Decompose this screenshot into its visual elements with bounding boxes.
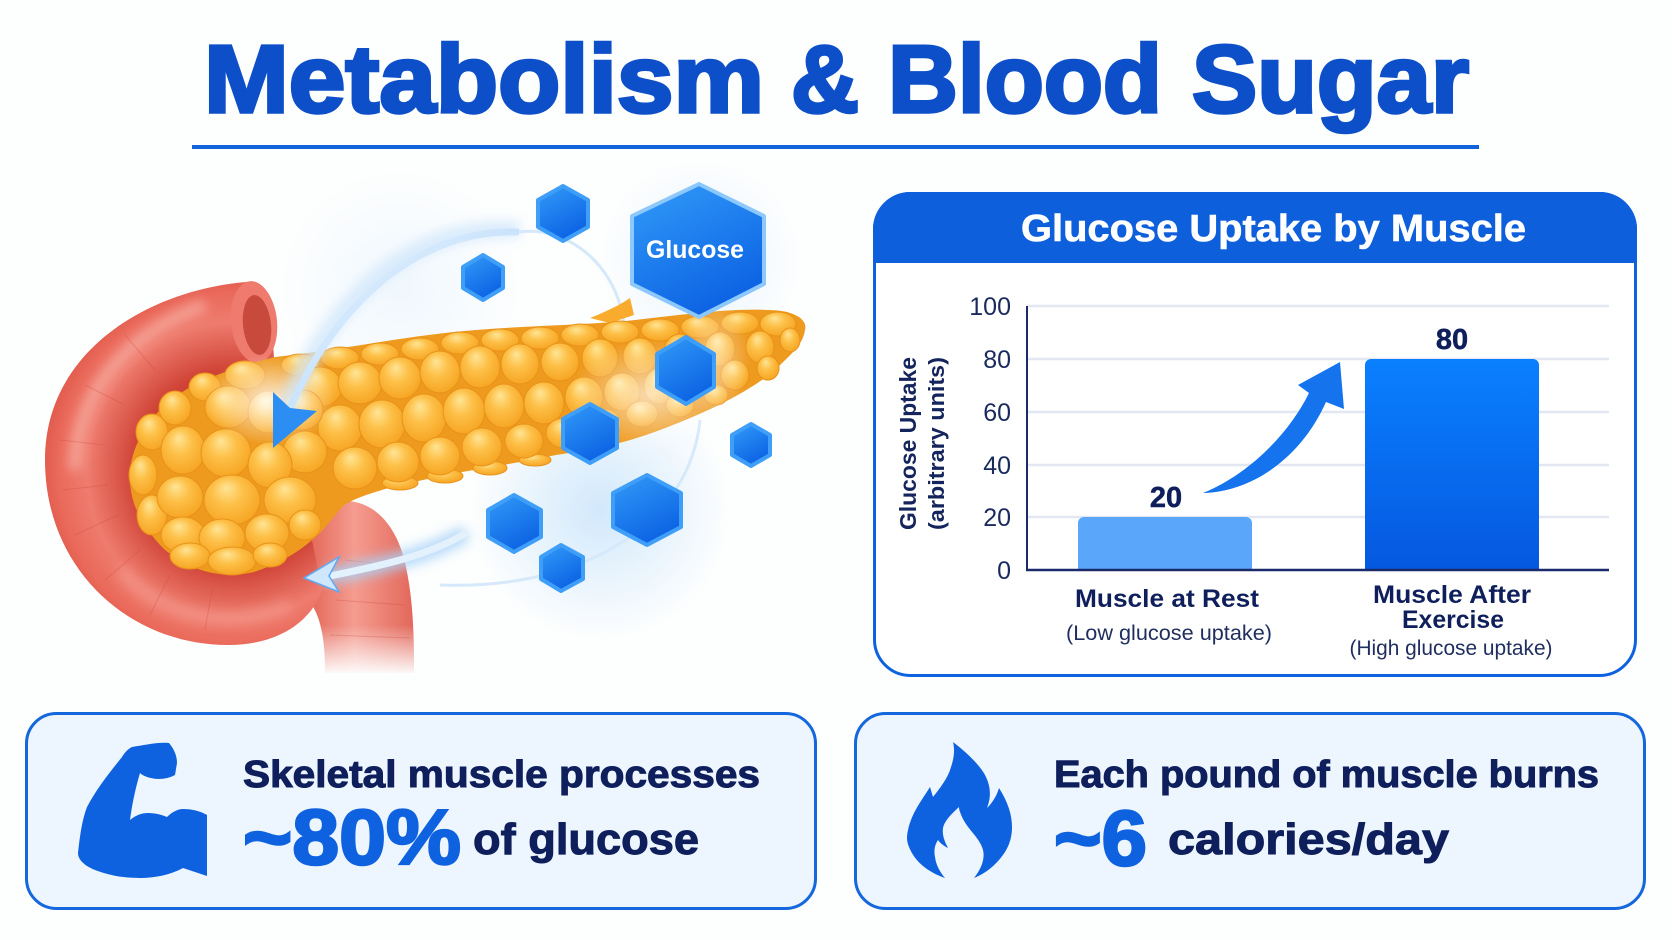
y axis ticks: 100 — [969, 293, 1011, 321]
chart header — [873, 192, 1637, 263]
icon: flame — [907, 742, 1012, 878]
y axis title: Glucose Uptake — [895, 357, 921, 530]
bar: muscle at rest — [1078, 482, 1252, 570]
icon: flexed arm — [78, 743, 207, 878]
title: Blood — [888, 26, 1162, 133]
panel: calories stat — [856, 714, 1644, 908]
C-shaped tube — [45, 282, 322, 645]
glucose molecules — [463, 186, 770, 591]
title — [192, 26, 1479, 149]
stat text — [1054, 754, 1599, 882]
pancreas — [129, 298, 805, 575]
arrow: glucose into pancreas — [273, 229, 519, 448]
illustration: pancreas, duodenum and glucose — [45, 160, 805, 675]
stat text: Skeletal muscle processes — [243, 754, 760, 796]
arrow: glucose into duodenum — [304, 533, 466, 592]
panel: skeletal muscle stat — [26, 714, 816, 908]
highlight wash — [205, 300, 750, 450]
title: & — [791, 26, 859, 133]
tube opening — [227, 279, 281, 365]
label: muscle at rest: (Low glucose uptake) — [1066, 622, 1272, 645]
y axis title — [895, 357, 949, 530]
label: muscle after exercise — [1350, 581, 1552, 660]
label: muscle at rest: Muscle at Rest — [1075, 585, 1260, 613]
y axis ticks: 80 — [983, 346, 1011, 374]
duodenum — [45, 279, 420, 675]
chart card — [874, 194, 1636, 676]
bar: muscle after exercise: 80 — [1436, 324, 1468, 356]
arrow: rest to exercise — [1203, 362, 1344, 493]
body kernels — [281, 312, 800, 490]
label: muscle after exercise: Exercise — [1402, 606, 1504, 634]
label: muscle at rest — [1066, 585, 1272, 645]
bar: muscle at rest: 20 — [1150, 482, 1182, 514]
y axis title: (arbitrary units) — [924, 357, 949, 530]
label: muscle after exercise: Muscle After — [1373, 581, 1531, 609]
y axis ticks: 20 — [983, 504, 1011, 532]
y axis ticks: 0 — [997, 557, 1011, 585]
label: muscle after exercise: (High glucose uptake) — [1350, 637, 1552, 660]
stat text: ~6 — [1054, 794, 1147, 882]
stat text: Each pound of muscle burns — [1054, 754, 1599, 796]
stat text: ~80% — [243, 793, 461, 881]
glucose hexagon label: Glucose — [646, 236, 744, 264]
panel: glucose uptake chart — [873, 192, 1637, 676]
orbit rings — [440, 231, 700, 585]
glucose hexagon label — [632, 184, 764, 317]
title: Metabolism — [204, 26, 764, 133]
y axis ticks — [969, 293, 1011, 585]
tail duct — [590, 298, 634, 323]
y axis ticks: 40 — [983, 452, 1011, 480]
y axis ticks: 60 — [983, 399, 1011, 427]
background glow — [280, 160, 800, 640]
stat text — [243, 754, 760, 881]
stat text: of glucose — [473, 815, 699, 864]
title: Sugar — [1192, 26, 1469, 133]
lower limb — [295, 501, 420, 675]
stat text: calories/day — [1168, 815, 1450, 864]
head kernels — [129, 361, 327, 575]
chart header: Glucose Uptake by Muscle — [1021, 208, 1526, 250]
bar: muscle after exercise — [1365, 324, 1539, 570]
